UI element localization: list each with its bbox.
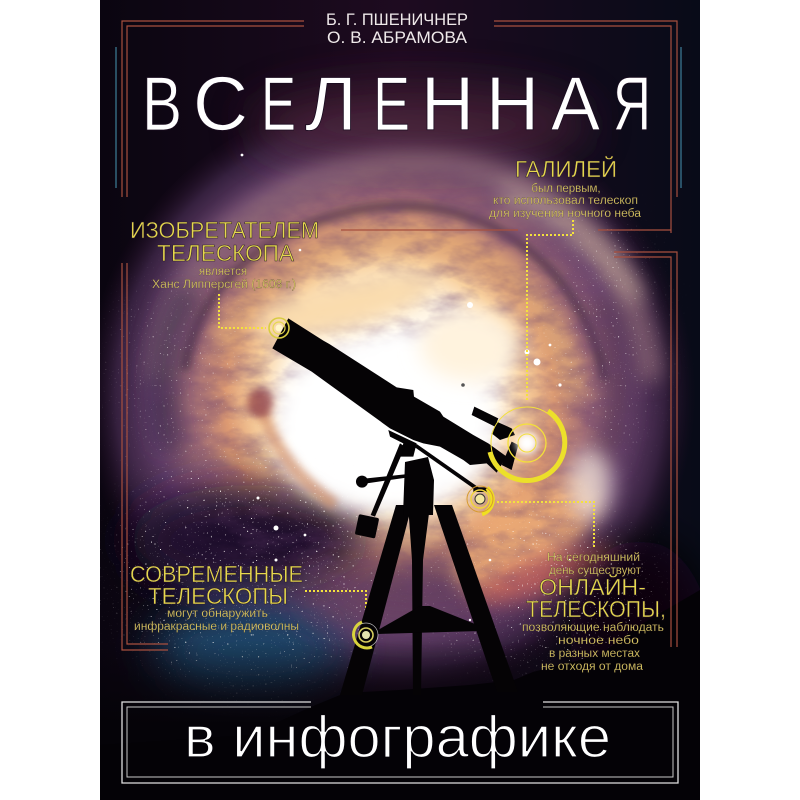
dark dot <box>461 383 465 387</box>
callout: modern telescopes: СОВРЕМЕННЫЕ <box>130 561 303 587</box>
title: Е <box>261 62 296 147</box>
callout: Galileo: ГАЛИЛЕЙ <box>515 155 617 182</box>
marker: eyepiece <box>490 407 565 481</box>
callout: online telescopes: день существуют <box>549 565 642 577</box>
title: Л <box>305 62 357 147</box>
callout: inventor: является <box>199 266 247 278</box>
marker: rod <box>467 486 493 514</box>
marker: objective <box>269 318 289 338</box>
marker: tripod <box>354 622 378 648</box>
callout: inventor <box>130 217 319 291</box>
title: Н <box>486 62 539 147</box>
authors <box>327 14 468 43</box>
hill silhouette <box>306 590 700 710</box>
tripod <box>340 457 518 695</box>
title <box>146 76 647 131</box>
authors: О. В. АБРАМОВА <box>327 28 468 47</box>
galaxy background <box>100 0 700 745</box>
callout: inventor: ТЕЛЕСКОПА <box>157 240 295 266</box>
subtitle: в инфографике <box>184 705 611 770</box>
callout: modern telescopes: ТЕЛЕСКОПЫ <box>148 583 288 609</box>
callout: inventor: ИЗОБРЕТАТЕЛЕМ <box>130 217 319 243</box>
frame lines <box>116 21 681 650</box>
book cover <box>100 0 700 800</box>
title: А <box>551 62 600 147</box>
callout: Galileo: был первым, <box>531 183 601 195</box>
callout: Galileo: кто использовал телескоп <box>493 195 638 207</box>
callout: modern telescopes: могут обнаружить <box>167 608 268 620</box>
callout: online telescopes: позволяющие наблюдать <box>522 622 664 634</box>
dotted connector lines <box>219 220 594 621</box>
optical tube <box>272 318 518 539</box>
title: В <box>142 62 182 147</box>
authors: Б. Г. ПШЕНИЧНЕР <box>326 10 468 29</box>
telescope silhouette <box>272 318 518 695</box>
callout: online telescopes: ночное небо <box>558 635 639 647</box>
title: Н <box>421 62 474 147</box>
callout: online telescopes: ТЕЛЕСКОПЫ, <box>526 596 666 622</box>
callout: online telescopes <box>522 552 666 673</box>
callout: online telescopes: На сегодняшний <box>547 552 640 564</box>
bottom box <box>122 702 678 783</box>
callout: inventor: Ханс Липперсгей (1608 г.) <box>152 279 296 291</box>
callout: online telescopes: в разных местах <box>549 648 640 660</box>
callout: Galileo: для изучения ночного неба <box>489 208 642 220</box>
callout: modern telescopes: инфракрасные и радиоволны <box>134 621 299 633</box>
title: С <box>193 62 248 147</box>
callout: Galileo <box>489 155 642 220</box>
title: Е <box>373 62 410 147</box>
title: Я <box>613 62 651 147</box>
callout: online telescopes: не отходя от дома <box>541 661 644 673</box>
callout: online telescopes: ОНЛАЙН- <box>539 573 646 600</box>
callout: modern telescopes <box>130 561 303 633</box>
